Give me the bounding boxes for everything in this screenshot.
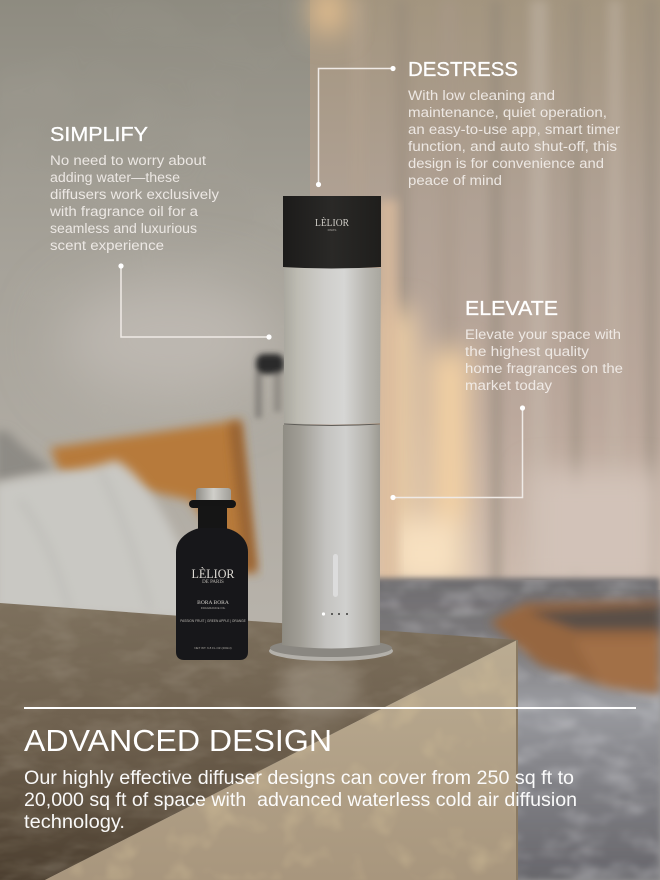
description: technology. (24, 812, 125, 833)
table side (45, 640, 517, 880)
small pillow (0, 430, 52, 482)
bottle label: NET WT. 6.8 FL.OZ (200ml) (194, 646, 232, 650)
description: 20,000 sq ft of space with advanced waterless cold air diffusion (24, 790, 577, 811)
text: destress: function, and auto shut-off, this (408, 139, 617, 154)
bottle of fragrance oil (176, 488, 248, 660)
bottle label: LÈLIOR (192, 566, 235, 581)
wall sconce (255, 354, 284, 418)
title: ADVANCED DESIGN (24, 723, 332, 758)
bottle label: DE PARIS (202, 580, 224, 585)
text: destress: With low cleaning and (408, 88, 555, 103)
text: destress: peace of mind (408, 173, 502, 188)
connector: elevate (390, 405, 525, 500)
text: simplify: with fragrance oil for a (49, 204, 199, 219)
diffuser lower body (282, 425, 380, 648)
text: elevate: the highest quality (465, 344, 589, 359)
cap logo (315, 217, 349, 232)
heading: elevate: ELEVATE (465, 298, 558, 320)
text: simplify (49, 153, 219, 253)
callout: elevate (390, 298, 623, 500)
text: simplify: No need to worry about (50, 153, 206, 168)
text: simplify: seamless and luxurious (50, 221, 197, 236)
indicator dots (322, 612, 348, 616)
text: destress: maintenance, quiet operation, (408, 105, 607, 120)
bottle collar and neck (189, 500, 236, 508)
bottle label (180, 566, 246, 650)
heading: destress: DESTRESS (408, 59, 518, 81)
concrete wall (0, 0, 330, 640)
headboard (50, 420, 256, 572)
light strip (333, 554, 338, 597)
connector: destress (316, 66, 396, 187)
warm glow (312, 0, 660, 590)
diffuser (269, 196, 393, 661)
diffuser base (269, 641, 393, 661)
reflection on table (280, 660, 360, 720)
connector: simplify (118, 263, 272, 340)
bottom section (24, 707, 636, 833)
table top (0, 603, 517, 880)
text: elevate (465, 327, 623, 393)
text: simplify: adding water—these (50, 170, 180, 185)
description: Our highly effective diffuser designs can cover from 250 sq ft to (24, 768, 574, 789)
callout: destress (316, 59, 621, 188)
basket (490, 600, 660, 694)
cap logo: PARIS (328, 228, 336, 232)
text: destress: an easy-to-use app, smart timer (408, 122, 621, 137)
text: destress: design is for convenience and (408, 156, 604, 171)
text: elevate: home fragrances on the (465, 361, 623, 376)
text: elevate: Elevate your space with (465, 327, 621, 342)
bottle stopper (196, 488, 231, 502)
text: destress (408, 88, 621, 188)
fur rug (370, 578, 660, 880)
text: elevate: market today (465, 378, 552, 393)
cap logo: LÈLIOR (315, 217, 349, 229)
description (24, 768, 577, 833)
bottle body (176, 528, 248, 660)
text: simplify: scent experience (50, 238, 164, 253)
bottle label: PASSION FRUIT | GREEN APPLE | ORANGE (180, 619, 246, 623)
callout: simplify (49, 124, 272, 340)
curtain (310, 0, 660, 590)
bottle label: BORA BORA (197, 600, 229, 606)
diffuser cap (283, 196, 381, 268)
bottle label: FRAGRANCE OIL (201, 606, 226, 610)
pale strip beside the diffuser (378, 200, 398, 590)
heading: simplify: SIMPLIFY (50, 124, 148, 146)
pillow (0, 460, 190, 620)
text: simplify: diffusers work exclusively (50, 187, 219, 202)
diffuser upper body (284, 268, 381, 424)
